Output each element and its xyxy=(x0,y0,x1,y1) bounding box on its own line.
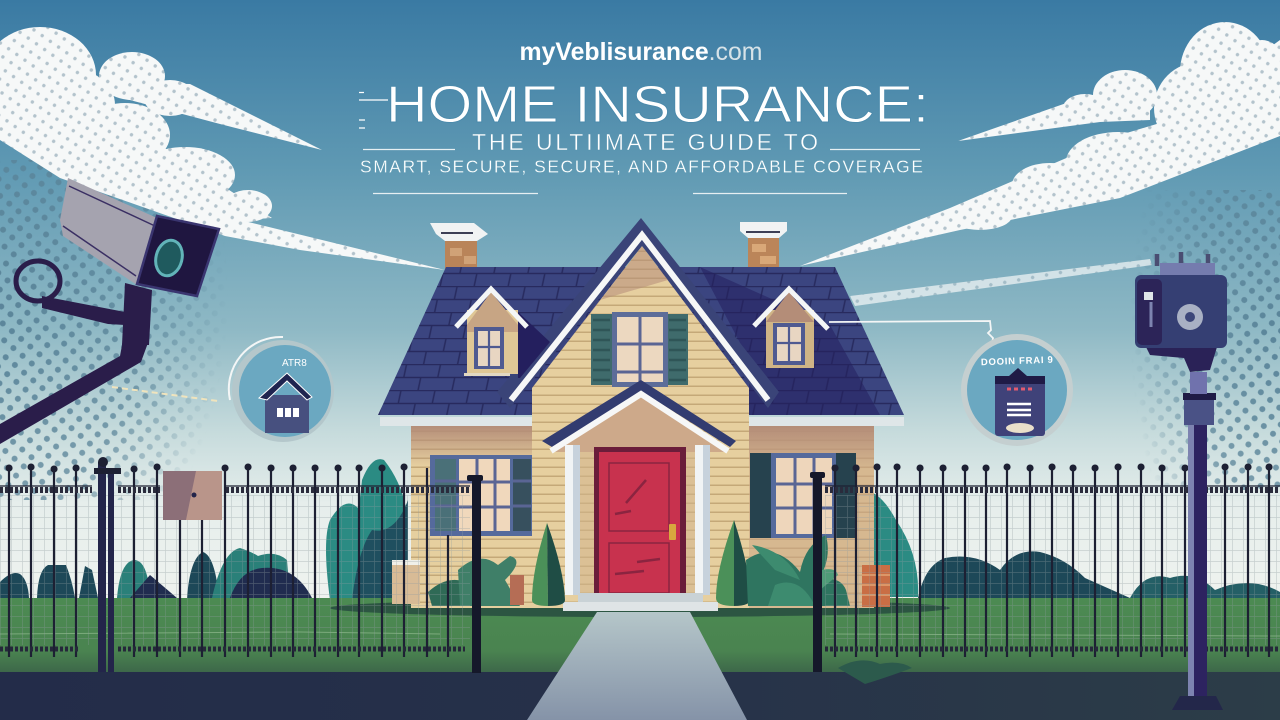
ornamental rail bottom left xyxy=(0,646,465,652)
ornamental rail top right xyxy=(825,487,1280,493)
ornamental rail top left xyxy=(0,487,470,493)
lower right window xyxy=(750,453,856,538)
fence sign xyxy=(163,471,222,520)
badge house icon xyxy=(259,373,312,433)
lamp base xyxy=(1172,696,1223,710)
ornamental rail bottom right xyxy=(825,646,1280,652)
halftone corner left xyxy=(0,160,211,500)
fence mesh left xyxy=(0,495,470,645)
house shadow on lawn xyxy=(330,599,950,617)
right dormer xyxy=(754,289,828,368)
badge left: home xyxy=(229,337,334,442)
grass tuft near walkway xyxy=(838,660,912,684)
left cone shrub xyxy=(532,523,565,606)
dashed connector left xyxy=(112,387,218,401)
lawn xyxy=(0,598,1280,674)
security camera right xyxy=(1135,252,1227,710)
left dormer xyxy=(456,289,550,378)
camera prongs xyxy=(1157,252,1208,266)
camera housing xyxy=(1135,275,1227,348)
lamp collar xyxy=(1183,393,1216,400)
camera top xyxy=(1160,263,1215,276)
right cone shrub xyxy=(716,520,751,606)
main gable roof band xyxy=(497,218,779,408)
gate post xyxy=(94,457,121,672)
camera pole xyxy=(0,340,149,444)
main gable wall xyxy=(532,246,749,608)
house xyxy=(378,218,904,611)
top rail line left xyxy=(0,485,470,487)
left eave xyxy=(380,417,532,426)
iron fence right xyxy=(810,467,1280,672)
corner post right xyxy=(810,472,825,672)
dark foreground ground xyxy=(0,672,1280,720)
cloud streak right xyxy=(850,259,1152,306)
cloud: large right xyxy=(800,22,1280,266)
pickets right xyxy=(835,468,1269,657)
security camera left xyxy=(0,178,219,444)
camera front xyxy=(137,216,219,296)
keypad device xyxy=(995,368,1045,436)
brick planter right xyxy=(862,565,890,607)
camera neck xyxy=(122,283,152,345)
porch shadow wall xyxy=(580,452,695,593)
lower left window xyxy=(430,455,532,536)
title accent lines xyxy=(359,92,388,128)
iron fence left xyxy=(0,457,483,673)
camera side panel xyxy=(1137,279,1162,345)
roof xyxy=(378,267,904,415)
lawn pale line xyxy=(0,632,1280,636)
badge text right: DOOIN FRAI 9 xyxy=(981,355,1053,368)
porch columns xyxy=(565,445,710,595)
badge text: ATR8 xyxy=(282,358,307,369)
walkway xyxy=(527,612,747,720)
left wing wall xyxy=(411,426,533,608)
camera lens xyxy=(152,237,186,279)
upper window xyxy=(591,312,688,387)
fence mesh right xyxy=(825,495,1280,645)
main gable white trim xyxy=(511,235,768,400)
camera lens right xyxy=(1177,304,1203,330)
lamp pole xyxy=(1188,424,1207,700)
halftone corner right xyxy=(1130,190,1280,490)
connector line right xyxy=(829,321,993,344)
stone planter left xyxy=(392,560,420,604)
porch gable fill xyxy=(551,392,728,452)
red door xyxy=(594,447,686,593)
camera side arm xyxy=(42,296,125,325)
top rail line right xyxy=(825,485,1280,487)
site logo: myVeblisurance.com xyxy=(520,38,762,66)
chimney left xyxy=(430,223,488,270)
camera body xyxy=(60,178,157,285)
finials left xyxy=(9,467,404,469)
cloud: small right xyxy=(958,70,1157,141)
main title: HOME INSURANCE: xyxy=(386,76,929,134)
chimney right xyxy=(740,222,787,270)
subtitle rules xyxy=(363,150,920,194)
background bushes right xyxy=(918,551,1280,598)
subtitle line one: THE ULTIIMATE GUIDE TO xyxy=(472,129,818,155)
camera ring xyxy=(16,261,60,301)
cloud: large left xyxy=(0,27,445,270)
subtitle line two: SMART, SECURE, SECURE, AND AFFORDABLE COVERAGE xyxy=(360,156,923,176)
finials right xyxy=(835,467,1269,468)
porch trim xyxy=(551,394,728,451)
right wing wall xyxy=(748,426,874,608)
roof shade right xyxy=(700,267,880,415)
teal tree right xyxy=(862,490,918,597)
teal trees left xyxy=(326,459,408,600)
porch roof xyxy=(542,380,736,447)
porch steps xyxy=(563,593,718,611)
right eave xyxy=(749,417,904,426)
pickets left xyxy=(9,468,448,657)
left leafy plant xyxy=(428,556,524,606)
background bushes left xyxy=(0,548,312,598)
right leafy plant xyxy=(746,535,850,606)
cloud: small left xyxy=(98,52,322,150)
badge right: keypad xyxy=(961,334,1073,446)
corner post left xyxy=(467,475,483,673)
camera neck right xyxy=(1146,347,1217,372)
